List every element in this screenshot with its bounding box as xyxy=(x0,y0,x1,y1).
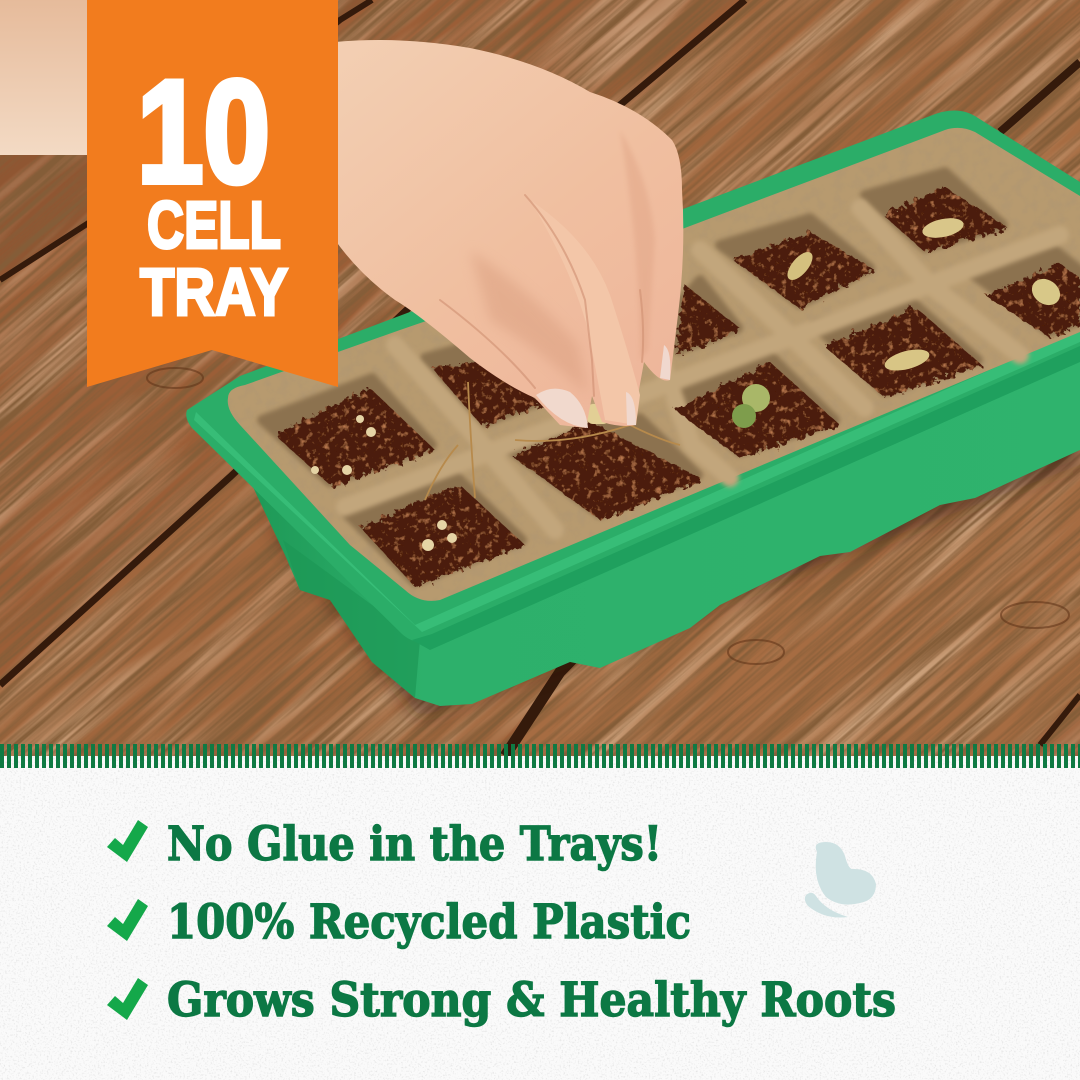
tray rim xyxy=(186,110,1080,642)
arm xyxy=(0,0,92,155)
tray body xyxy=(245,340,1080,706)
seeds xyxy=(311,215,1065,551)
seed tray xyxy=(186,110,1080,706)
cell wells xyxy=(262,172,1080,582)
benefit 2 text: 100% Recycled Plastic xyxy=(167,895,691,950)
finger creases xyxy=(440,195,643,396)
orange banner xyxy=(87,0,338,387)
butterfly icon xyxy=(805,842,876,918)
check icon xyxy=(107,978,148,1020)
pulp ribs xyxy=(345,208,1060,530)
benefit 2 xyxy=(107,895,691,950)
check icon xyxy=(107,899,148,941)
banner number: 10 xyxy=(137,50,270,213)
banner word: tray: TRAY xyxy=(140,255,288,330)
soil cells xyxy=(275,187,1080,587)
benefit 3 xyxy=(107,973,896,1028)
benefit 3 text: Grows Strong & Healthy Roots xyxy=(167,973,896,1028)
wood table background xyxy=(0,0,1080,756)
benefit 1 text: No Glue in the Trays! xyxy=(167,817,662,872)
fingernails xyxy=(536,389,588,428)
striped green border xyxy=(0,744,1080,768)
hand xyxy=(335,40,683,428)
benefit 1 xyxy=(107,817,662,872)
root strands xyxy=(425,382,680,500)
shadow under tray xyxy=(262,420,1080,718)
palm shadow xyxy=(470,250,588,395)
fabric panel xyxy=(0,756,1080,1080)
banner word: cell: CELL xyxy=(147,188,281,263)
check icon xyxy=(107,820,148,862)
pulp insert xyxy=(228,128,1080,601)
